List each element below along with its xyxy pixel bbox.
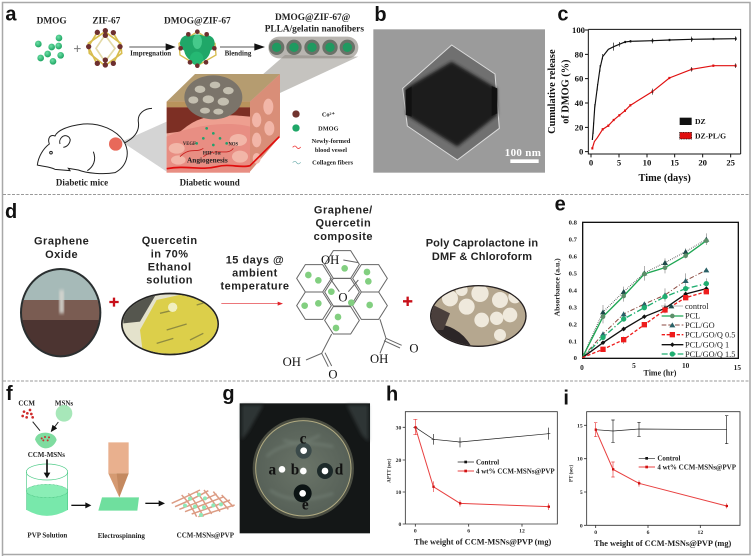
diabetic wound skin block: HIF-1α: [203, 150, 221, 156]
panel letter f: f: [6, 383, 13, 405]
icon: spinneret: [108, 442, 129, 497]
step captions: CCM-MSNs@PVP: [177, 532, 235, 540]
legend of schematic: DMOG: [318, 125, 339, 132]
panel h: APTT chart: [386, 384, 557, 547]
tick labels: 6: [647, 530, 650, 536]
x tick labels and title: 15: [734, 363, 741, 372]
y tick labels: 0.3: [569, 305, 578, 312]
error bars: [603, 233, 706, 344]
icon: ZIF-67 cage: [86, 28, 123, 68]
chemical structure of composite: OH: [370, 352, 388, 366]
series: PCL: [582, 238, 709, 358]
legend of schematic: Co²⁺: [322, 111, 335, 118]
photo: petri dish: d: [335, 461, 344, 478]
label: composite: Graphene/: [314, 204, 373, 216]
tick labels: 0: [414, 529, 417, 535]
diabetic wound skin block: [167, 74, 280, 173]
y axis title: Absorbance (a.u.): [552, 258, 561, 316]
icon: MSN sphere: [56, 405, 72, 422]
x tick labels and title: 10: [682, 361, 690, 370]
y tick labels: 0.5: [569, 271, 578, 278]
legend: Control: [476, 458, 499, 466]
photo: graphene oxide vial: [20, 268, 103, 358]
panel a: DMOG nanofiber schematic: [5, 4, 364, 187]
axis titles: The weight of CCM-MSNs@PVP (mg): [594, 539, 732, 548]
legend: PCL/GO/Q 0.5: [685, 331, 735, 340]
axis tick labels: 100: [572, 25, 585, 35]
axis titles: [388, 458, 552, 547]
zoom cone from wound to capsule: [232, 55, 358, 110]
TEM image: [373, 29, 545, 173]
tick labels: 0: [580, 523, 583, 529]
axis tick labels: 15: [670, 158, 680, 168]
x tick labels and title: Time (hr): [644, 368, 677, 377]
photo: petri dish: b: [291, 461, 299, 478]
legend: [662, 302, 735, 359]
labels of synthesis steps: DMOG@ZIF-67: [164, 16, 231, 26]
icon: DMOG@ZIF-67 cage: [178, 29, 217, 68]
tick labels: 12: [698, 530, 703, 536]
panel letter c: c: [557, 4, 568, 26]
legend: [680, 117, 726, 140]
plus sign: [403, 297, 412, 306]
arrow: blending: [220, 43, 265, 58]
nanofiber capsule: [268, 37, 358, 58]
tick labels: 10: [396, 490, 402, 496]
label: quercetin: Ethanol: [148, 261, 192, 273]
photo: petri dish: c: [300, 430, 307, 447]
tick labels: [396, 425, 525, 535]
axis titles: PT (sec): [569, 464, 574, 482]
chemical structure of composite: O: [409, 341, 418, 355]
x tick labels and title: [580, 361, 741, 377]
x tick labels and title: 5: [632, 361, 636, 370]
series: control: [582, 237, 709, 358]
series: PCL/GO: [582, 267, 709, 358]
panel i: PT chart: [563, 388, 740, 548]
axis titles: of DMOG (%): [560, 60, 571, 124]
reaction conditions: ambient: [232, 267, 278, 279]
panel letter e: e: [555, 193, 566, 215]
arrow: blending: Blending: [225, 50, 252, 58]
axis titles: The weight of CCM-MSNs@PVP (mg): [414, 538, 552, 547]
series: 4 wt% CCM-MSNs@PVP: [413, 419, 550, 510]
panel e: absorbance chart: [552, 193, 741, 377]
tick labels: 6: [467, 529, 470, 535]
scale bar: 100 nm: [505, 147, 541, 159]
series: control: [596, 416, 728, 444]
icon: DMOG spheres: [35, 35, 64, 65]
axis tick labels: 40: [575, 98, 583, 108]
arrow: impregnation: Impregnation: [130, 50, 171, 58]
labels: CCM and MSNs: CCM: [18, 399, 35, 407]
y tick labels: 0.8: [569, 220, 578, 227]
legend: PCL/GO/Q 1: [685, 341, 729, 350]
chemical structure of composite: O: [338, 291, 347, 305]
y tick labels: [569, 220, 578, 362]
chemical structure of composite: [283, 251, 418, 381]
label: poly caprolactone: Poly Caprolactone in: [426, 238, 538, 250]
labels of synthesis steps: DMOG: [37, 17, 67, 27]
axis tick labels: 0: [589, 158, 593, 168]
arrows to loaded MSN: [33, 422, 58, 431]
panel f: electrospinning schematic: [6, 383, 235, 540]
panel b: TEM micrograph: [373, 4, 545, 173]
labels of synthesis steps: [37, 13, 364, 35]
legend: [639, 455, 737, 471]
label: quercetin: solution: [146, 274, 193, 286]
label: quercetin: Quercetin: [142, 235, 198, 247]
labels of synthesis steps: ZIF-67: [92, 16, 121, 26]
diabetic wound skin block: VEGF: [183, 142, 196, 147]
arrow to electrospinning: [71, 502, 91, 508]
tick labels: 15: [577, 423, 583, 429]
axis tick labels: 20: [575, 122, 583, 132]
axis tick labels: 10: [643, 158, 651, 168]
legend of schematic: Newly-formed: [312, 138, 351, 145]
legend: [458, 458, 555, 475]
label: quercetin: in 70%: [151, 248, 189, 260]
panel d: graphene quercetin composite schematic: [5, 201, 538, 381]
reaction conditions: temperature: [220, 280, 289, 292]
legend: DZ-PL/G: [695, 131, 726, 140]
axis tick labels: 20: [698, 158, 707, 168]
reaction conditions: 15 days @: [226, 254, 284, 266]
axis tick labels: 25: [726, 158, 736, 168]
photo: petri dish: [240, 403, 370, 533]
tick labels: 30: [396, 425, 402, 431]
labels: CCM and MSNs: MSNs: [55, 399, 73, 407]
captions: Diabetic wound: [180, 177, 240, 187]
diabetic wound skin block: Angiogenesis: [187, 156, 228, 165]
step captions: PVP Solution: [27, 532, 67, 540]
axis tick labels: 60: [575, 74, 583, 84]
panel c: cumulative release chart: [547, 4, 741, 184]
panel letter d: d: [5, 201, 17, 223]
labels of synthesis steps: DMOG@ZIF-67@: [275, 13, 351, 23]
legend: 4 wt% CCM-MSNs@PVP: [657, 463, 737, 471]
tick labels: 20: [396, 458, 402, 464]
y tick labels: 0.4: [569, 288, 578, 295]
captions: Diabetic mice: [56, 177, 108, 187]
label: CCM-MSNs: CCM-MSNs: [28, 451, 65, 459]
plot frame: [583, 222, 738, 358]
legend: control: [685, 302, 709, 311]
axis titles: APTT (sec): [388, 458, 393, 483]
axis titles: [547, 49, 691, 184]
panel letter h: h: [386, 384, 398, 406]
panel g: agar plate photo: [222, 383, 370, 533]
captions: [56, 177, 240, 187]
legend: PCL/GO/Q 1.5: [685, 350, 735, 359]
axis tick labels: 0: [579, 147, 583, 157]
icon: fibre mat: [172, 490, 235, 517]
label: composite: composite: [314, 231, 373, 243]
y tick labels: 0.6: [569, 254, 578, 261]
tick labels: [577, 423, 703, 536]
axes frame: [584, 412, 740, 528]
panel letter g: g: [222, 383, 235, 405]
legend: Control: [657, 455, 681, 463]
icon: CCM particles: [21, 409, 34, 419]
series: DZ-PL/G: [591, 63, 737, 148]
icon: PVP solution beaker: [26, 459, 68, 516]
wound spot on mouse: [109, 137, 122, 151]
series: PCL/GO/Q 1.5: [582, 281, 709, 358]
axes frame: [403, 412, 557, 527]
photo: petri dish: e: [302, 497, 309, 514]
panel letter b: b: [374, 4, 387, 26]
icon: collector sheet: [98, 497, 139, 511]
series: PCL/GO/Q 0.5: [582, 289, 709, 358]
axis tick labels: [572, 25, 736, 168]
axis tick labels: 80: [575, 49, 583, 59]
legend of schematic: blood vessel: [315, 147, 347, 154]
plus sign: [109, 298, 119, 307]
chemical structure of composite: OH: [283, 355, 301, 369]
label: graphene oxide: Oxide: [45, 249, 78, 261]
legend: PCL: [685, 312, 700, 321]
y tick labels: 0: [574, 355, 578, 362]
labels: CCM and MSNs: [18, 399, 73, 407]
legend of schematic: Collagen fibers: [312, 159, 354, 166]
series: control: [413, 427, 550, 447]
arrow to fibers: [145, 500, 165, 506]
series: 4 wt% CCM-MSNs@PVP: [594, 423, 728, 508]
series: PCL/GO/Q 1: [582, 286, 709, 358]
icon: CCM-MSN particle: [35, 433, 57, 448]
label: composite: Quercetin: [315, 218, 371, 230]
axes: [585, 29, 741, 157]
step captions: Electrospinning: [98, 532, 145, 540]
chemical structure of composite: O: [328, 367, 337, 381]
diabetic wound skin block: NOS: [229, 143, 239, 148]
y tick labels: 0.7: [569, 237, 578, 244]
axis titles: [569, 464, 732, 548]
series: DZ: [592, 36, 737, 140]
legend: DZ: [695, 117, 706, 126]
tick labels: 5: [580, 490, 583, 496]
chemical structure of composite: OH: [321, 253, 339, 267]
tick labels: 12: [519, 529, 525, 535]
photo: quercetin powder: [120, 293, 220, 357]
axis tick labels: 5: [617, 158, 622, 168]
x tick labels and title: 0: [580, 363, 584, 372]
legend: 4 wt% CCM-MSNs@PVP: [476, 467, 555, 475]
arrow: reaction: [221, 302, 283, 306]
icon: diabetic mouse: [37, 108, 152, 174]
step captions: [27, 532, 235, 540]
photo: PCL pellets: [430, 284, 530, 350]
label: graphene oxide: Graphene: [34, 236, 89, 248]
label: poly caprolactone: DMF & Chloroform: [432, 251, 532, 263]
labels of synthesis steps: PLLA/gelatin nanofibers: [265, 25, 364, 35]
tick labels: 0: [594, 530, 597, 536]
axis titles: Time (days): [639, 173, 691, 184]
arrow: impregnation: [129, 43, 176, 58]
plus sign: [74, 45, 81, 52]
zoom cone from mouse to wound: [122, 122, 167, 172]
legend: PCL/GO: [685, 321, 715, 330]
panel letter a: a: [5, 4, 17, 26]
axis titles: Cumulative release: [547, 49, 558, 134]
tick labels: 10: [577, 457, 583, 463]
y tick labels: 0.1: [569, 338, 577, 345]
photo: petri dish: a: [268, 461, 276, 478]
y tick labels: 0.2: [569, 321, 578, 328]
panel letter i: i: [563, 388, 569, 410]
tick labels: 0: [399, 522, 402, 528]
legend of schematic: [292, 110, 354, 166]
